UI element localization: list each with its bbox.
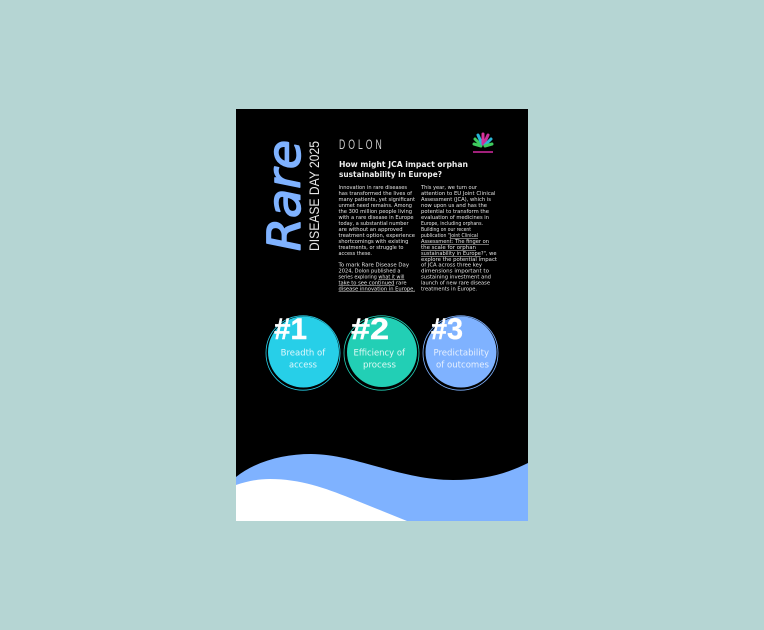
text column 1: shortcomings with existing xyxy=(338,239,408,245)
text column 1: with a rare disease in Europe xyxy=(338,215,414,221)
item 2: Efficiency of process: #2 xyxy=(351,313,389,346)
text column 1: are without an approved xyxy=(338,227,402,233)
icon: Rare Disease Day hands logo xyxy=(473,134,493,153)
heading: How might JCA impact orphan xyxy=(339,159,468,169)
item 3: Predictability of outcomes: Predictability xyxy=(434,348,489,358)
text column 2: Europe, including orphans. xyxy=(421,221,483,227)
white wave xyxy=(236,479,407,521)
item 1: Breadth of access xyxy=(266,313,340,390)
text column 2: Assessment (JCA), which is xyxy=(421,197,491,203)
title: Rare: Rare xyxy=(258,140,311,251)
item 1: Breadth of access: access xyxy=(289,360,317,370)
poster panel xyxy=(236,109,528,521)
item 1: Breadth of access: Breadth of xyxy=(281,348,326,358)
text column 1: disease innovation in Europe. xyxy=(338,286,415,292)
text column 2: sustainability in Europe ?", we xyxy=(421,251,497,257)
text column 2: Building on our recent xyxy=(421,227,471,233)
text column 1: 2024, Dolon published a xyxy=(338,268,400,274)
text column 1: take to see continued rare xyxy=(338,280,406,286)
item 1: Breadth of access: #1 xyxy=(274,313,307,346)
item 3: Predictability of outcomes: of outcomes xyxy=(436,360,489,370)
text column 1 xyxy=(337,185,415,292)
item 3: Predictability of outcomes: #3 xyxy=(431,313,463,346)
text column 2: treatments in Europe. xyxy=(421,286,477,292)
text column 2: attention to EU Joint Clinical xyxy=(421,191,496,197)
text column 1: access these. xyxy=(338,251,372,257)
text column 2: now upon us and has the xyxy=(421,203,487,209)
subtitle: Disease Day 2025: DISEASE DAY 2025 xyxy=(307,141,322,251)
text column 2: dimensions important to xyxy=(421,268,489,274)
text column 2: evaluation of medicines in xyxy=(421,215,489,221)
blue wave xyxy=(236,454,528,521)
text column 1: the 300 million people living xyxy=(338,209,412,215)
text column 1: unmet need remains. Among xyxy=(338,203,412,209)
text column 2: sustaining investment and xyxy=(421,274,491,280)
heading: sustainability in Europe? xyxy=(339,169,442,179)
text column 2: potential to transform the xyxy=(421,209,489,215)
text column 2: launch of new rare disease xyxy=(421,280,490,286)
text column 2: the scale for orphan xyxy=(421,245,476,251)
text column 2: of JCA across three key xyxy=(421,262,482,268)
heading xyxy=(339,159,468,179)
text column 1: today, a substantial number xyxy=(338,221,409,227)
text column 1: treatments, or struggle to xyxy=(338,245,404,251)
text column 2: explore the potential impact xyxy=(421,257,497,263)
item 2: Efficiency of process: Efficiency of xyxy=(354,348,406,358)
text column 2: Assessment: The finger on xyxy=(421,239,489,245)
text column 1: treatment option, experience xyxy=(338,233,415,239)
text column 2: publication "Joint Clinical xyxy=(421,233,478,239)
text column 1: series exploring what it will xyxy=(338,274,404,280)
text column 2: This year, we turn our xyxy=(420,185,478,191)
text column 1: many patients, yet significant xyxy=(338,197,415,203)
logo: Dolon: DOLON xyxy=(339,137,382,153)
text column 1: has transformed the lives of xyxy=(338,191,412,197)
text column 1: Innovation in rare diseases xyxy=(338,185,407,191)
item 3: Predictability of outcomes xyxy=(423,313,498,390)
item 2: Efficiency of process xyxy=(344,313,419,390)
text column 1: To mark Rare Disease Day xyxy=(337,262,409,268)
text column 2 xyxy=(420,185,497,292)
item 2: Efficiency of process: process xyxy=(363,360,396,370)
